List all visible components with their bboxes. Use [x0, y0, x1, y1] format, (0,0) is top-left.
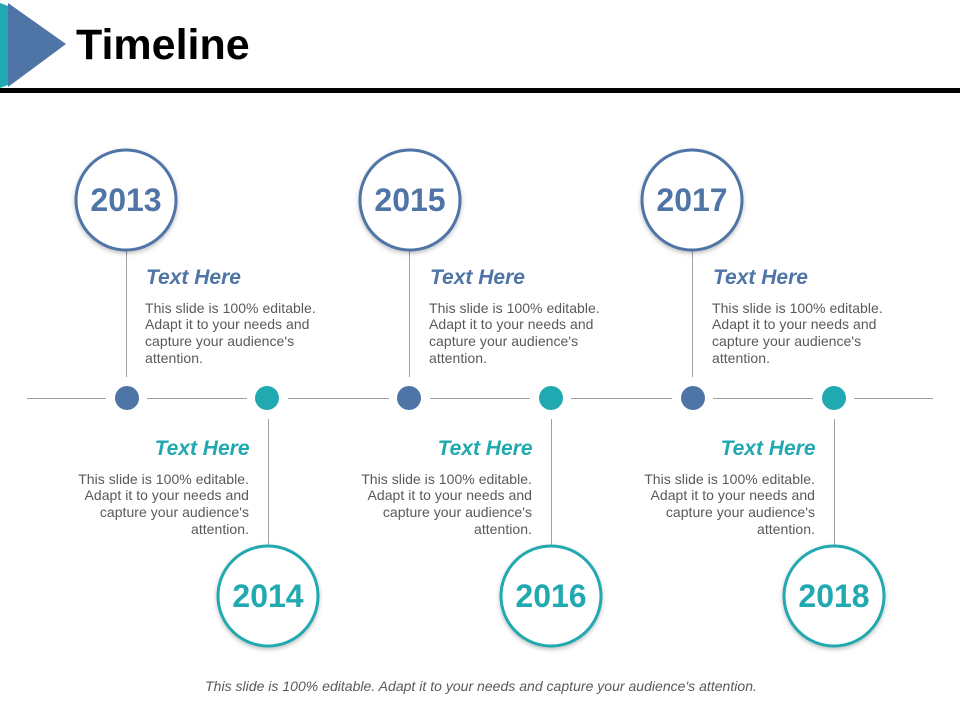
milestone 2017 [642, 150, 883, 410]
milestone 2014: attention. [191, 521, 249, 537]
footer note: This slide is 100% editable. Adapt it to your needs and capture your audience's attention. [205, 678, 757, 694]
header rule [0, 88, 960, 93]
milestone 2018: Adapt it to your needs and [650, 487, 815, 503]
milestone 2014: This slide is 100% editable. [78, 471, 249, 487]
milestone 2016: Text Here [438, 437, 533, 460]
milestone 2015: attention. [429, 350, 487, 366]
milestone 2013: Text Here [146, 266, 241, 289]
milestone 2017: 2017 [656, 182, 728, 218]
milestone 2014: Adapt it to your needs and [84, 487, 249, 503]
milestone 2014 [78, 386, 318, 646]
milestone 2014: Text Here [155, 437, 250, 460]
milestone 2015: Text Here [430, 266, 525, 289]
milestone 2014: capture your audience's [100, 504, 249, 520]
milestone 2015: This slide is 100% editable. [429, 300, 600, 316]
milestone 2013 [76, 150, 316, 410]
milestone 2017: Text Here [713, 266, 808, 289]
milestone 2013: 2013 [90, 182, 162, 218]
milestone 2018: 2018 [798, 578, 870, 614]
milestone 2015: capture your audience's [429, 333, 578, 349]
milestone 2017: capture your audience's [712, 333, 861, 349]
milestone 2015: Adapt it to your needs and [429, 316, 594, 332]
timeline axis [27, 398, 933, 400]
milestone 2015: 2015 [374, 182, 446, 218]
milestone 2018: attention. [757, 521, 815, 537]
milestone 2016: 2016 [515, 578, 587, 614]
milestone 2013: This slide is 100% editable. [145, 300, 316, 316]
milestone 2017: attention. [712, 350, 770, 366]
milestone 2016 [361, 386, 601, 646]
milestone 2016: Adapt it to your needs and [368, 487, 532, 503]
milestone 2017: Adapt it to your needs and [712, 316, 876, 332]
milestone 2018: This slide is 100% editable. [644, 471, 815, 487]
milestone 2018: capture your audience's [666, 504, 815, 520]
milestone 2016: This slide is 100% editable. [361, 471, 532, 487]
title: Timeline [76, 21, 250, 69]
milestone 2013: Adapt it to your needs and [145, 316, 310, 332]
milestone 2014: 2014 [232, 578, 304, 614]
milestone 2013: capture your audience's [145, 333, 294, 349]
milestone 2013: attention. [145, 350, 203, 366]
milestone 2017: This slide is 100% editable. [712, 300, 883, 316]
milestone 2016: capture your audience's [383, 504, 532, 520]
milestone 2018 [644, 386, 884, 646]
milestone 2018: Text Here [721, 437, 816, 460]
milestone 2016: attention. [474, 521, 532, 537]
header icon: triangles [0, 3, 66, 88]
milestone 2015 [360, 150, 600, 410]
